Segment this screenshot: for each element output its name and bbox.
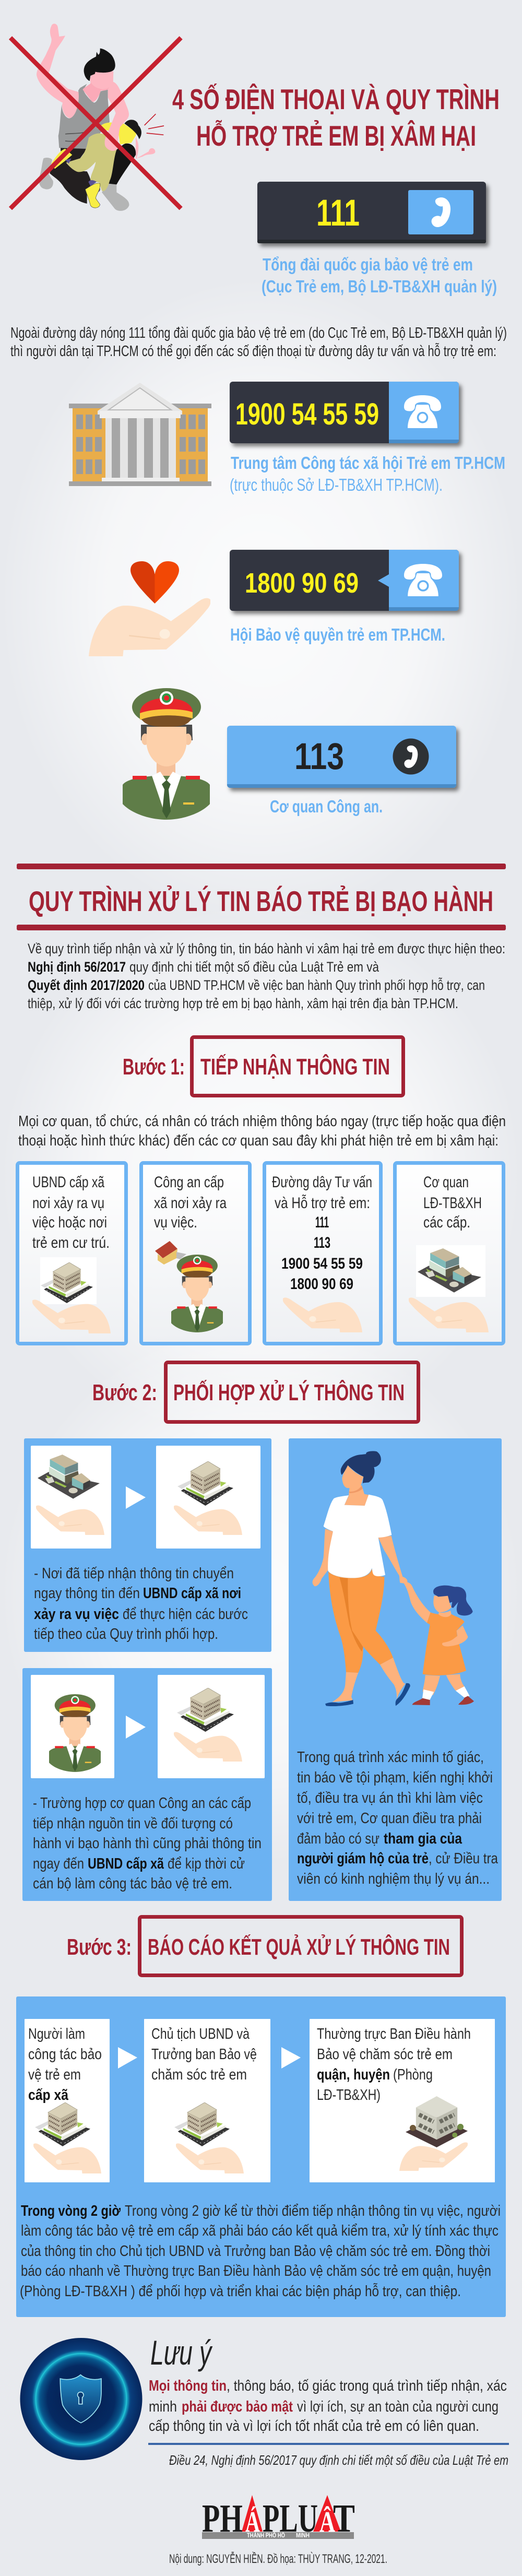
panel: mother and child with investigation note: tin báo về tội phạm, kiến nghị khởi [297, 1769, 493, 1786]
card: hotline numbers: 111 [315, 1214, 329, 1231]
panel: receiving point forwards to commune: để thực hiện các bước [123, 1606, 248, 1623]
card: labour department: Cơ quan [423, 1174, 469, 1191]
card: labour department [395, 1163, 503, 1344]
section heading [17, 864, 506, 930]
panel: police inform commune: tiếp nhận nguồn tin về đối tượng có [33, 1815, 233, 1832]
caption: 111: Tổng đài quốc gia bảo vệ trẻ em [263, 255, 473, 274]
card: commune people's committee: việc hoặc nơi [32, 1214, 107, 1231]
step 1 heading: TIẾP NHẬN THÔNG TIN [200, 1053, 390, 1080]
intro paragraph [10, 325, 507, 360]
box: chairman of commune committee: Trưởng ban Bảo vệ [151, 2046, 257, 2063]
step 1 heading [123, 1037, 403, 1095]
note text: minh [149, 2398, 177, 2415]
panel: mother and child with investigation note: người giám hộ của trẻ [297, 1850, 429, 1867]
box: district steering board: Bảo vệ chăm sóc trẻ em [317, 2046, 453, 2063]
card: hotline numbers [264, 1163, 381, 1344]
step 1 heading: Bước 1: [123, 1054, 185, 1080]
box: district steering board [310, 2019, 495, 2182]
panel: police inform commune: UBND cấp xã [88, 1856, 164, 1872]
hotline panel: 1800 90 69: 1800 90 69 [245, 568, 359, 599]
panel: police inform commune: hành vi bạo hành thì cũng phải thông tin [33, 1835, 262, 1852]
logo: Pháp Luật: MINH [296, 2532, 310, 2539]
icon: security shield [20, 2338, 142, 2460]
box: district steering board: (Phòng [393, 2066, 433, 2083]
panel: reporting chain [16, 1996, 506, 2317]
icon: heart above open hand [89, 561, 211, 656]
panel: mother and child with investigation note: tố, điều tra vụ án thì khi làm việc [297, 1790, 483, 1806]
text: two-hour reporting rule: Trong vòng 2 giờ [21, 2203, 121, 2219]
card: commune people's committee: trẻ em cư trú. [32, 1234, 110, 1251]
panel: police inform commune: - Trường hợp cơ quan Công an các cấp [33, 1795, 251, 1812]
step 3 heading: Bước 3: [67, 1934, 132, 1960]
caption: 113: Cơ quan Công an. [270, 797, 383, 816]
card: commune police: xã nơi xảy ra [154, 1195, 227, 1212]
box: commune child protection officer: cấp xã [28, 2087, 69, 2104]
legal basis paragraph [28, 941, 505, 1011]
box: chairman of commune committee [144, 2019, 270, 2182]
card: hotline numbers: 1900 54 55 59 [281, 1255, 363, 1272]
divider and legal citation [148, 2443, 509, 2468]
card: commune people's committee: nơi xảy ra vụ [32, 1195, 104, 1212]
panel: police inform commune: để kịp thời cử [168, 1856, 245, 1872]
box: district steering board: Thường trực Ban Điều hành [317, 2026, 471, 2042]
card: hotline numbers: 1800 90 69 [290, 1275, 353, 1293]
step 3 heading [67, 1917, 461, 1976]
panel: receiving point forwards to commune: xảy ra vụ việc [34, 1606, 119, 1623]
note heading: Lưu ý [150, 2333, 213, 2372]
card: labour department: LĐ-TB&XH [423, 1195, 482, 1212]
hotline panel: 1900 54 55 59: 1900 54 55 59 [235, 397, 379, 431]
box: commune child protection officer [25, 2019, 110, 2182]
panel: receiving point forwards to commune: - Nơi đã tiếp nhận thông tin chuyển [34, 1565, 234, 1582]
arrow [281, 2047, 301, 2069]
panel: receiving point forwards to commune: tiếp theo của Quy trình phối hợp. [34, 1626, 218, 1643]
logo: Pháp Luật: PH [202, 2497, 243, 2540]
note text: phải được bảo mật [182, 2398, 293, 2415]
hotline panel: 111 [257, 182, 486, 243]
caption: 1800 90 69: Hội Bảo vệ quyền trẻ em TP.HCM. [230, 625, 445, 644]
note text: Mọi thông tin [149, 2378, 227, 2394]
box: chairman of commune committee: Chủ tịch UBND và [151, 2026, 250, 2042]
legal basis paragraph: Quyết định 2017/2020 [28, 977, 145, 993]
caption: 1900 54 55 59: (trực thuộc Sở LĐ-TB&XH TP.HCM). [230, 475, 443, 494]
hotline panel: 1900 54 55 59 [230, 382, 459, 443]
box: chairman of commune committee: chăm sóc trẻ em [151, 2066, 247, 2083]
credits: Nội dung: NGUYỄN HIỀN. Đồ họa: THÙY TRANG, 12-2021. [169, 2551, 387, 2566]
card: hotline numbers: và Hỗ trợ trẻ em: [275, 1195, 370, 1212]
panel: mother and child with investigation note: , cử Điều tra [429, 1850, 499, 1867]
card: commune people's committee [18, 1163, 126, 1344]
box: commune child protection officer: Người làm [28, 2026, 85, 2042]
panel: mother and child with investigation note: tham gia của [384, 1830, 462, 1847]
hotline panel: 113: 113 [294, 736, 344, 777]
step 2 heading: PHỐI HỢP XỬ LÝ THÔNG TIN [173, 1379, 405, 1405]
card: commune police [141, 1163, 250, 1344]
logo: Pháp Luật: Ậ [319, 2506, 335, 2538]
step 2 heading: Bước 2: [92, 1380, 157, 1405]
panel: mother and child with investigation note: với trẻ em, Cơ quan điều tra phải [297, 1810, 482, 1827]
panel: police inform commune [22, 1668, 272, 1901]
icon: social work centre building [69, 383, 211, 486]
logo: Pháp Luật: T [333, 2497, 355, 2540]
text: two-hour reporting rule [20, 2203, 501, 2300]
card: hotline numbers: 113 [314, 1234, 330, 1251]
hotline panel: 1800 90 69 [230, 550, 459, 611]
illustration: crossed-out violence against a child [10, 23, 181, 211]
panel: receiving point forwards to commune [24, 1438, 271, 1652]
caption: 111 [262, 255, 497, 296]
caption: 1900 54 55 59 [230, 453, 505, 494]
panel: receiving point forwards to commune: ngay thông tin đến [34, 1585, 140, 1602]
logo: Pháp Luật: Á [245, 2506, 260, 2538]
illustration: mother holding child's hand [313, 1451, 474, 1706]
box: commune child protection officer: vệ trẻ em [28, 2066, 81, 2083]
step 2 heading [92, 1363, 419, 1422]
card: commune police: Công an cấp [154, 1174, 224, 1191]
panel: police inform commune: ngay đến [33, 1856, 84, 1872]
legal basis paragraph: Nghị định 56/2017 [28, 959, 126, 975]
panel: mother and child with investigation note: Trong quá trình xác minh tố giác, [297, 1749, 484, 1766]
note text [149, 2378, 507, 2435]
card: commune police: vụ việc. [154, 1214, 197, 1231]
box: district steering board: LĐ-TB&XH) [317, 2087, 381, 2104]
card: commune people's committee: UBND cấp xã [32, 1174, 104, 1191]
panel: police inform commune: cán bộ làm công tác bảo vệ trẻ em. [33, 1875, 232, 1892]
step 1 description [18, 1113, 506, 1149]
box: district steering board: quận, huyện [317, 2066, 390, 2083]
hotline panel: 111: 111 [316, 193, 360, 234]
hotline panel: 113 [227, 726, 456, 788]
panel: mother and child with investigation note: viên có kinh nghiệm thụ lý vụ án... [297, 1871, 490, 1887]
logo: Pháp Luật: THÀNH PHỐ HỒ [247, 2531, 285, 2539]
panel: mother and child with investigation note [289, 1438, 502, 1901]
card: hotline numbers: Đường dây Tư vấn [272, 1174, 372, 1191]
panel: mother and child with investigation note: đảm bảo có sự [297, 1830, 379, 1847]
logo: Pháp Luật [202, 2495, 355, 2540]
panel: receiving point forwards to commune: UBND cấp xã nơi [143, 1585, 241, 1602]
title [172, 83, 500, 152]
icon: police officer [123, 688, 210, 820]
legal basis paragraph: quy định chi tiết một số điều của Luật Trẻ em và [129, 959, 379, 975]
card: labour department: các cấp. [423, 1214, 470, 1231]
arrow [118, 2047, 137, 2069]
logo: Pháp Luật: PLU [263, 2497, 318, 2540]
box: commune child protection officer: công tác bảo [28, 2046, 102, 2063]
